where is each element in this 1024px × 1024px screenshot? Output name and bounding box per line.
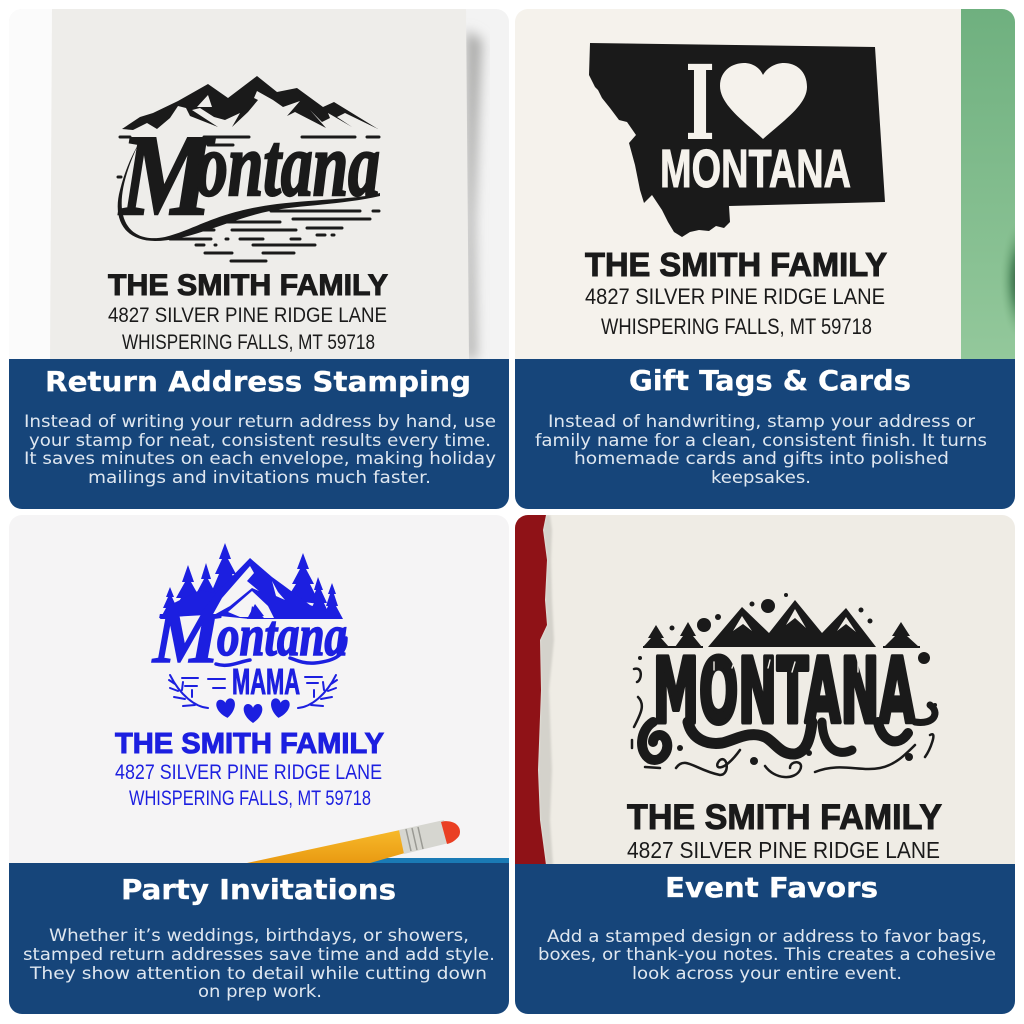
description: family name for a clean, consistent finish. It turns xyxy=(535,431,987,450)
stamp address text xyxy=(108,269,388,354)
caption bar xyxy=(515,359,1015,509)
description xyxy=(538,927,996,983)
caption bar xyxy=(515,864,1015,1014)
script word Montana: M xyxy=(152,598,222,678)
caption bar xyxy=(9,359,509,509)
description: your stamp for neat, consistent results every time. xyxy=(29,431,491,450)
panel: gift tags and cards xyxy=(515,9,1024,509)
icon: pine trees xyxy=(160,543,343,619)
icon: mountains and trees xyxy=(643,600,920,648)
flowing swashes xyxy=(632,669,935,777)
photo: white paper with pencil xyxy=(9,515,509,865)
script word Montana: M xyxy=(118,112,215,239)
heading: Return Address Stamping xyxy=(45,365,471,398)
caption bar xyxy=(9,863,509,1014)
stamp address text: WHISPERING FALLS, MT 59718 xyxy=(601,314,872,339)
description: Whether it’s weddings, birthdays, or showers, xyxy=(49,926,469,945)
description: They show attention to detail while cutting down xyxy=(29,964,487,983)
state shape xyxy=(589,43,885,237)
panel: party invitations xyxy=(9,515,509,1014)
icon: three hearts xyxy=(216,698,290,723)
swoosh xyxy=(216,638,346,665)
description: homemade cards and gifts into polished xyxy=(574,449,949,468)
stamp address text xyxy=(115,728,384,810)
heading: Event Favors xyxy=(665,871,878,904)
swoosh under lettering xyxy=(118,141,380,241)
heading: Gift Tags & Cards xyxy=(629,364,911,397)
icon: pencil xyxy=(247,820,460,863)
stamp address text: 4827 SILVER PINE RIDGE LANE xyxy=(108,304,387,327)
description xyxy=(23,926,495,1001)
stamp: I love Montana state silhouette xyxy=(589,43,885,237)
photo: cream card on green background xyxy=(515,9,1024,359)
stamp address text: 4827 SILVER PINE RIDGE LANE xyxy=(115,761,382,784)
description: Instead of writing your return address by hand, use xyxy=(24,412,496,431)
stamp: hand lettered Montana logo xyxy=(632,593,937,777)
photo: torn paper on red background xyxy=(515,515,1015,865)
water lines xyxy=(118,137,379,261)
decorative dots xyxy=(638,593,937,765)
icon: heart xyxy=(720,63,807,139)
icon: mountain xyxy=(200,558,343,619)
script word Montana: ontana xyxy=(217,603,347,668)
stamp: Montana Mama blue logo xyxy=(152,543,347,723)
description xyxy=(535,412,987,487)
stamp: Montana mountains logo xyxy=(118,76,380,261)
description: stamped return addresses save time and add style. xyxy=(23,945,495,964)
stamp address text: THE SMITH FAMILY xyxy=(627,798,942,837)
icon: mountain range xyxy=(122,76,378,130)
stamp address text: WHISPERING FALLS, MT 59718 xyxy=(122,331,375,354)
description: keepsakes. xyxy=(711,468,811,487)
panel: event favors xyxy=(515,515,1015,1014)
stamp address text: THE SMITH FAMILY xyxy=(585,246,887,283)
description: Instead of handwriting, stamp your address or xyxy=(548,412,975,431)
heading: Party Invitations xyxy=(121,873,396,906)
inline highlight strokes xyxy=(677,660,858,686)
letter I: I xyxy=(685,43,715,164)
stamp address text: 4827 SILVER PINE RIDGE LANE xyxy=(585,284,885,309)
stamp address text: THE SMITH FAMILY xyxy=(108,269,388,302)
description: boxes, or thank-you notes. This creates a cohesive xyxy=(538,945,996,964)
icon: laurel branches and dashes xyxy=(169,675,337,708)
word MAMA: MAMA xyxy=(232,661,300,702)
stamp address text xyxy=(627,798,942,863)
photo: paper on white background xyxy=(9,9,509,359)
description: It saves minutes on each envelope, making holiday xyxy=(24,449,496,468)
description: mailings and invitations much faster. xyxy=(88,468,431,487)
description: on prep work. xyxy=(198,982,322,1001)
description: look across your entire event. xyxy=(632,964,902,983)
stamp address text: THE SMITH FAMILY xyxy=(115,728,384,760)
stamp address text: 4827 SILVER PINE RIDGE LANE xyxy=(627,837,940,863)
script word Montana: ontana xyxy=(196,116,380,215)
description xyxy=(24,412,496,487)
panel: return address stamping xyxy=(9,9,509,509)
word MONTANA: MONTANA xyxy=(660,139,851,199)
stamp address text xyxy=(585,246,887,339)
stamp address text: WHISPERING FALLS, MT 59718 xyxy=(129,787,371,810)
description: Add a stamped design or address to favor bags, xyxy=(547,927,987,946)
